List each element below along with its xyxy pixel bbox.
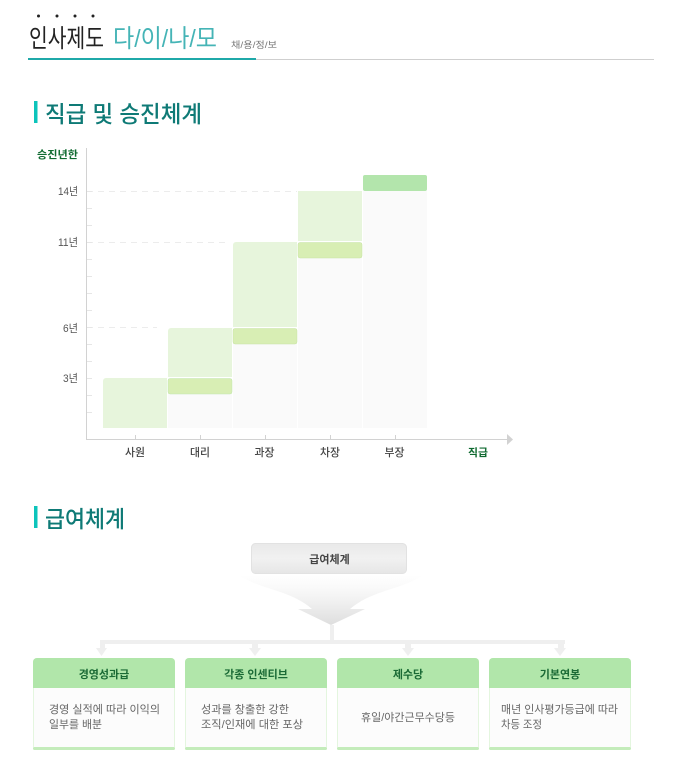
card: 경영성과급: 일부를 배분 — [49, 717, 102, 731]
bar: 사원 — [103, 378, 167, 428]
bar: 과장 — [233, 242, 297, 428]
bar: 부장 — [363, 175, 427, 428]
card: 제수당 — [337, 658, 479, 750]
bar: 차장 — [298, 191, 362, 428]
page title — [28, 14, 654, 60]
card: 각종 인센티브: 성과를 창출한 강한 — [201, 703, 289, 716]
x labels — [125, 445, 404, 459]
y labels: 3년 — [63, 372, 78, 385]
y axis title: 승진년한 — [37, 148, 78, 161]
card: 기본연봉: 차등 조정 — [501, 718, 542, 731]
card: 경영성과급 — [33, 658, 175, 750]
x labels: 부장 — [384, 446, 404, 459]
diagram: salary structure — [33, 544, 631, 750]
title main text: 인사제도 — [29, 25, 104, 53]
card: 경영성과급: 경영 실적에 따라 이익의 — [49, 703, 160, 716]
y labels: 11년 — [58, 236, 78, 249]
dashed guides — [87, 192, 297, 328]
axes — [86, 148, 513, 445]
heading: 직급 및 승진체계: 직급 및 승진체계 — [45, 101, 202, 127]
title underline — [28, 58, 654, 60]
heading: 급여체계: 급여체계 — [45, 506, 125, 532]
card: 제수당: 제수당 — [393, 667, 423, 681]
card: 각종 인센티브 — [185, 658, 327, 750]
card: 기본연봉: 기본연봉 — [540, 667, 580, 681]
card: 각종 인센티브: 조직/인재에 대한 포상 — [201, 718, 303, 731]
top box: 급여체계 — [252, 544, 406, 574]
chart: promotion years by rank — [37, 148, 513, 459]
card: 기본연봉: 매년 인사평가등급에 따라 — [501, 703, 618, 716]
x labels: 차장 — [320, 446, 340, 459]
x labels: 대리 — [190, 445, 210, 459]
card: 기본연봉 — [489, 658, 631, 750]
card: 제수당: 휴일/야간근무수당등 — [361, 710, 455, 724]
title small caption: 채/용/정/보 — [231, 40, 277, 50]
y labels: 14년 — [58, 185, 78, 198]
title teal text: 다/이/나/모 — [113, 25, 217, 53]
connector lines — [96, 625, 566, 656]
title emphasis dots — [37, 14, 94, 18]
y labels: 6년 — [63, 322, 78, 335]
bar: 대리 — [168, 328, 232, 428]
x labels: 과장 — [254, 446, 274, 459]
top box: 급여체계: 급여체계 — [309, 552, 350, 566]
funnel arrow — [240, 576, 422, 625]
x labels: 사원 — [125, 445, 145, 459]
y labels — [58, 185, 78, 385]
x axis title: 직급 — [468, 447, 488, 459]
y tick marks — [86, 192, 92, 412]
card: 경영성과급: 경영성과급 — [79, 667, 129, 681]
card: 각종 인센티브: 각종 인센티브 — [224, 668, 288, 681]
